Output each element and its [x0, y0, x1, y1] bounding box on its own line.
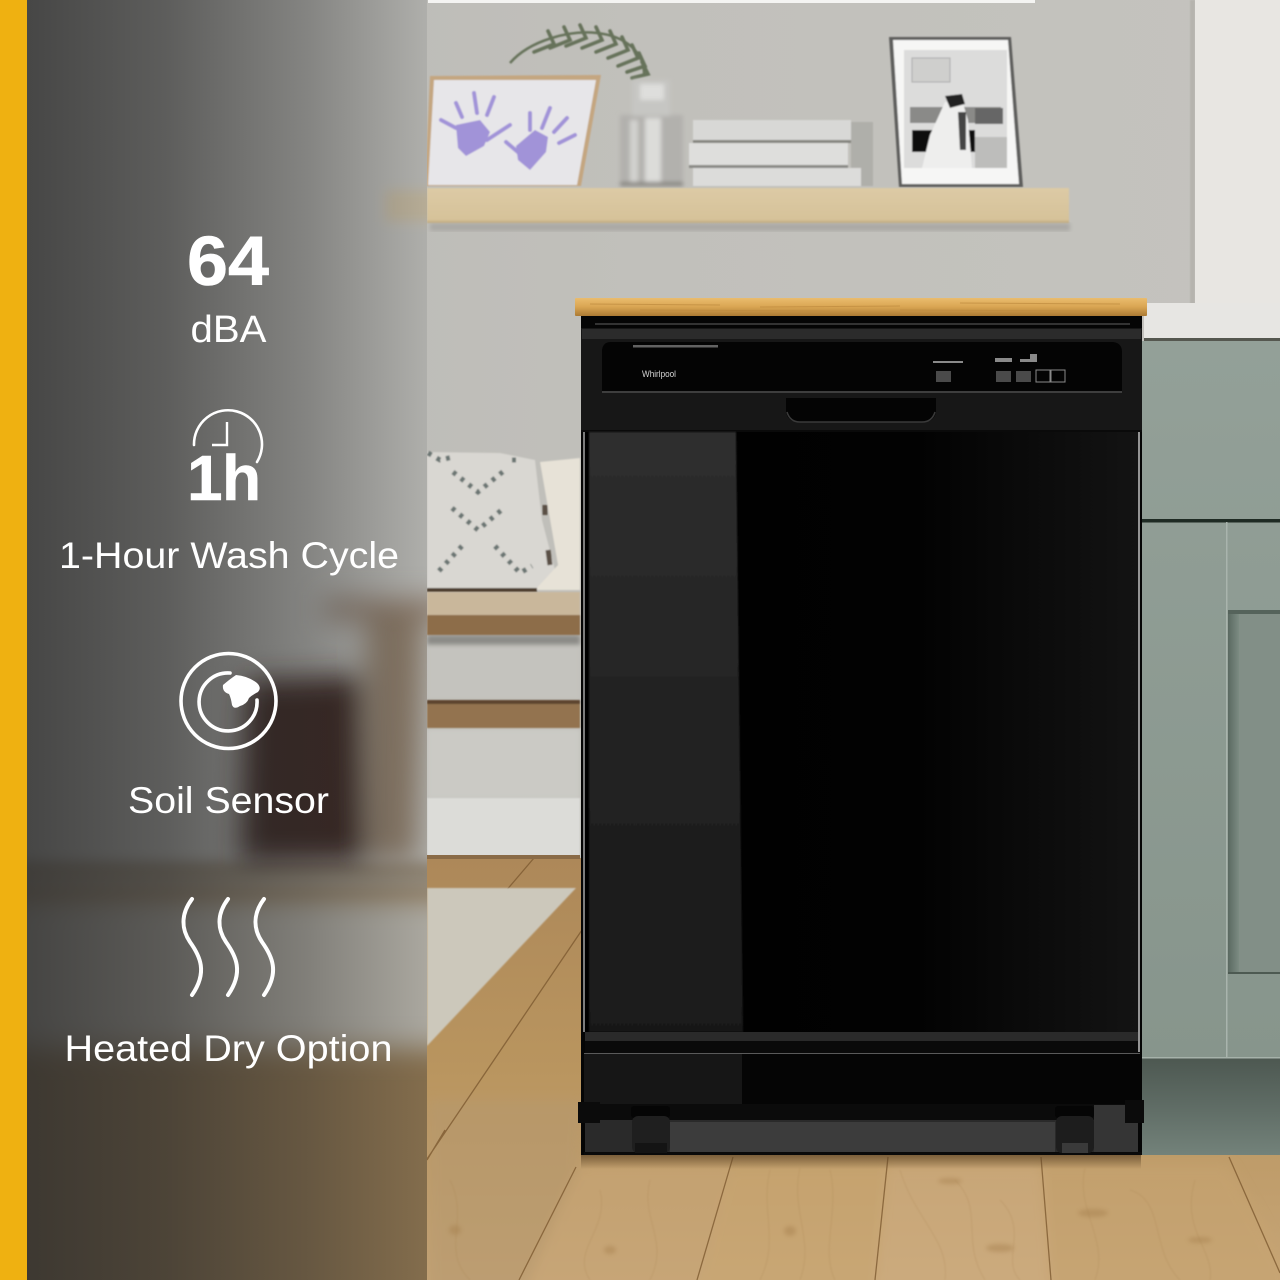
left caster	[631, 1106, 670, 1153]
wooden shelf	[427, 188, 1069, 223]
baseboard	[427, 798, 580, 859]
icon: clock with 1h: 1h	[187, 442, 261, 514]
floor grain	[450, 1168, 1210, 1280]
floor plank seams	[427, 858, 1280, 1280]
left blurred panel background	[27, 0, 427, 1280]
dark left-to-right overlay	[27, 0, 427, 1280]
stacked books	[689, 120, 873, 186]
main door	[585, 432, 1138, 1032]
area rug	[427, 888, 576, 1046]
icon: heat waves	[184, 899, 273, 995]
floor wood tone streaks	[427, 1100, 1280, 1280]
side brackets	[578, 1102, 600, 1123]
feature: heated dry option	[64, 899, 392, 1069]
bench boards	[427, 592, 580, 728]
label dBA: dBA	[190, 309, 267, 351]
toe panel	[584, 1054, 1140, 1122]
shelf shadow on wall	[430, 223, 1070, 231]
black and white framed photo	[889, 37, 1023, 187]
icon: clock with 1h	[187, 410, 262, 514]
brand label: Whirlpool	[642, 369, 676, 380]
lower door strip	[585, 1032, 1138, 1041]
framed handprints	[425, 75, 601, 186]
cushion	[427, 452, 580, 592]
panel buttons	[936, 371, 1031, 382]
plant frond	[510, 25, 648, 78]
body	[581, 316, 1142, 1155]
glass vase	[620, 80, 683, 186]
wood top	[575, 298, 1147, 316]
door reflection	[589, 432, 743, 1032]
countertop	[1144, 303, 1280, 339]
shelf with decor	[425, 25, 1070, 231]
green base cabinet	[1142, 341, 1280, 1058]
control panel	[602, 342, 1122, 392]
feature: soil sensor	[128, 654, 329, 821]
dishwasher	[575, 298, 1147, 1155]
feature: noise level	[187, 222, 269, 351]
counter and cabinet	[1142, 303, 1280, 1155]
label: Soil Sensor	[128, 780, 329, 821]
value 64: 64	[187, 222, 269, 300]
wall behind bench	[427, 635, 580, 799]
feature: 1-hour wash cycle	[59, 410, 399, 576]
door handle	[786, 398, 936, 422]
bench with cushion	[427, 452, 580, 1046]
yellow side bar	[0, 0, 27, 1280]
icon: soil sensor	[181, 654, 276, 748]
floor knots	[449, 1178, 1212, 1254]
shadow under dishwasher	[581, 1155, 1141, 1169]
label: Heated Dry Option	[64, 1028, 392, 1069]
label: 1-Hour Wash Cycle	[59, 535, 399, 576]
right caster	[1055, 1106, 1094, 1153]
blurred furniture silhouettes	[0, 600, 470, 1048]
